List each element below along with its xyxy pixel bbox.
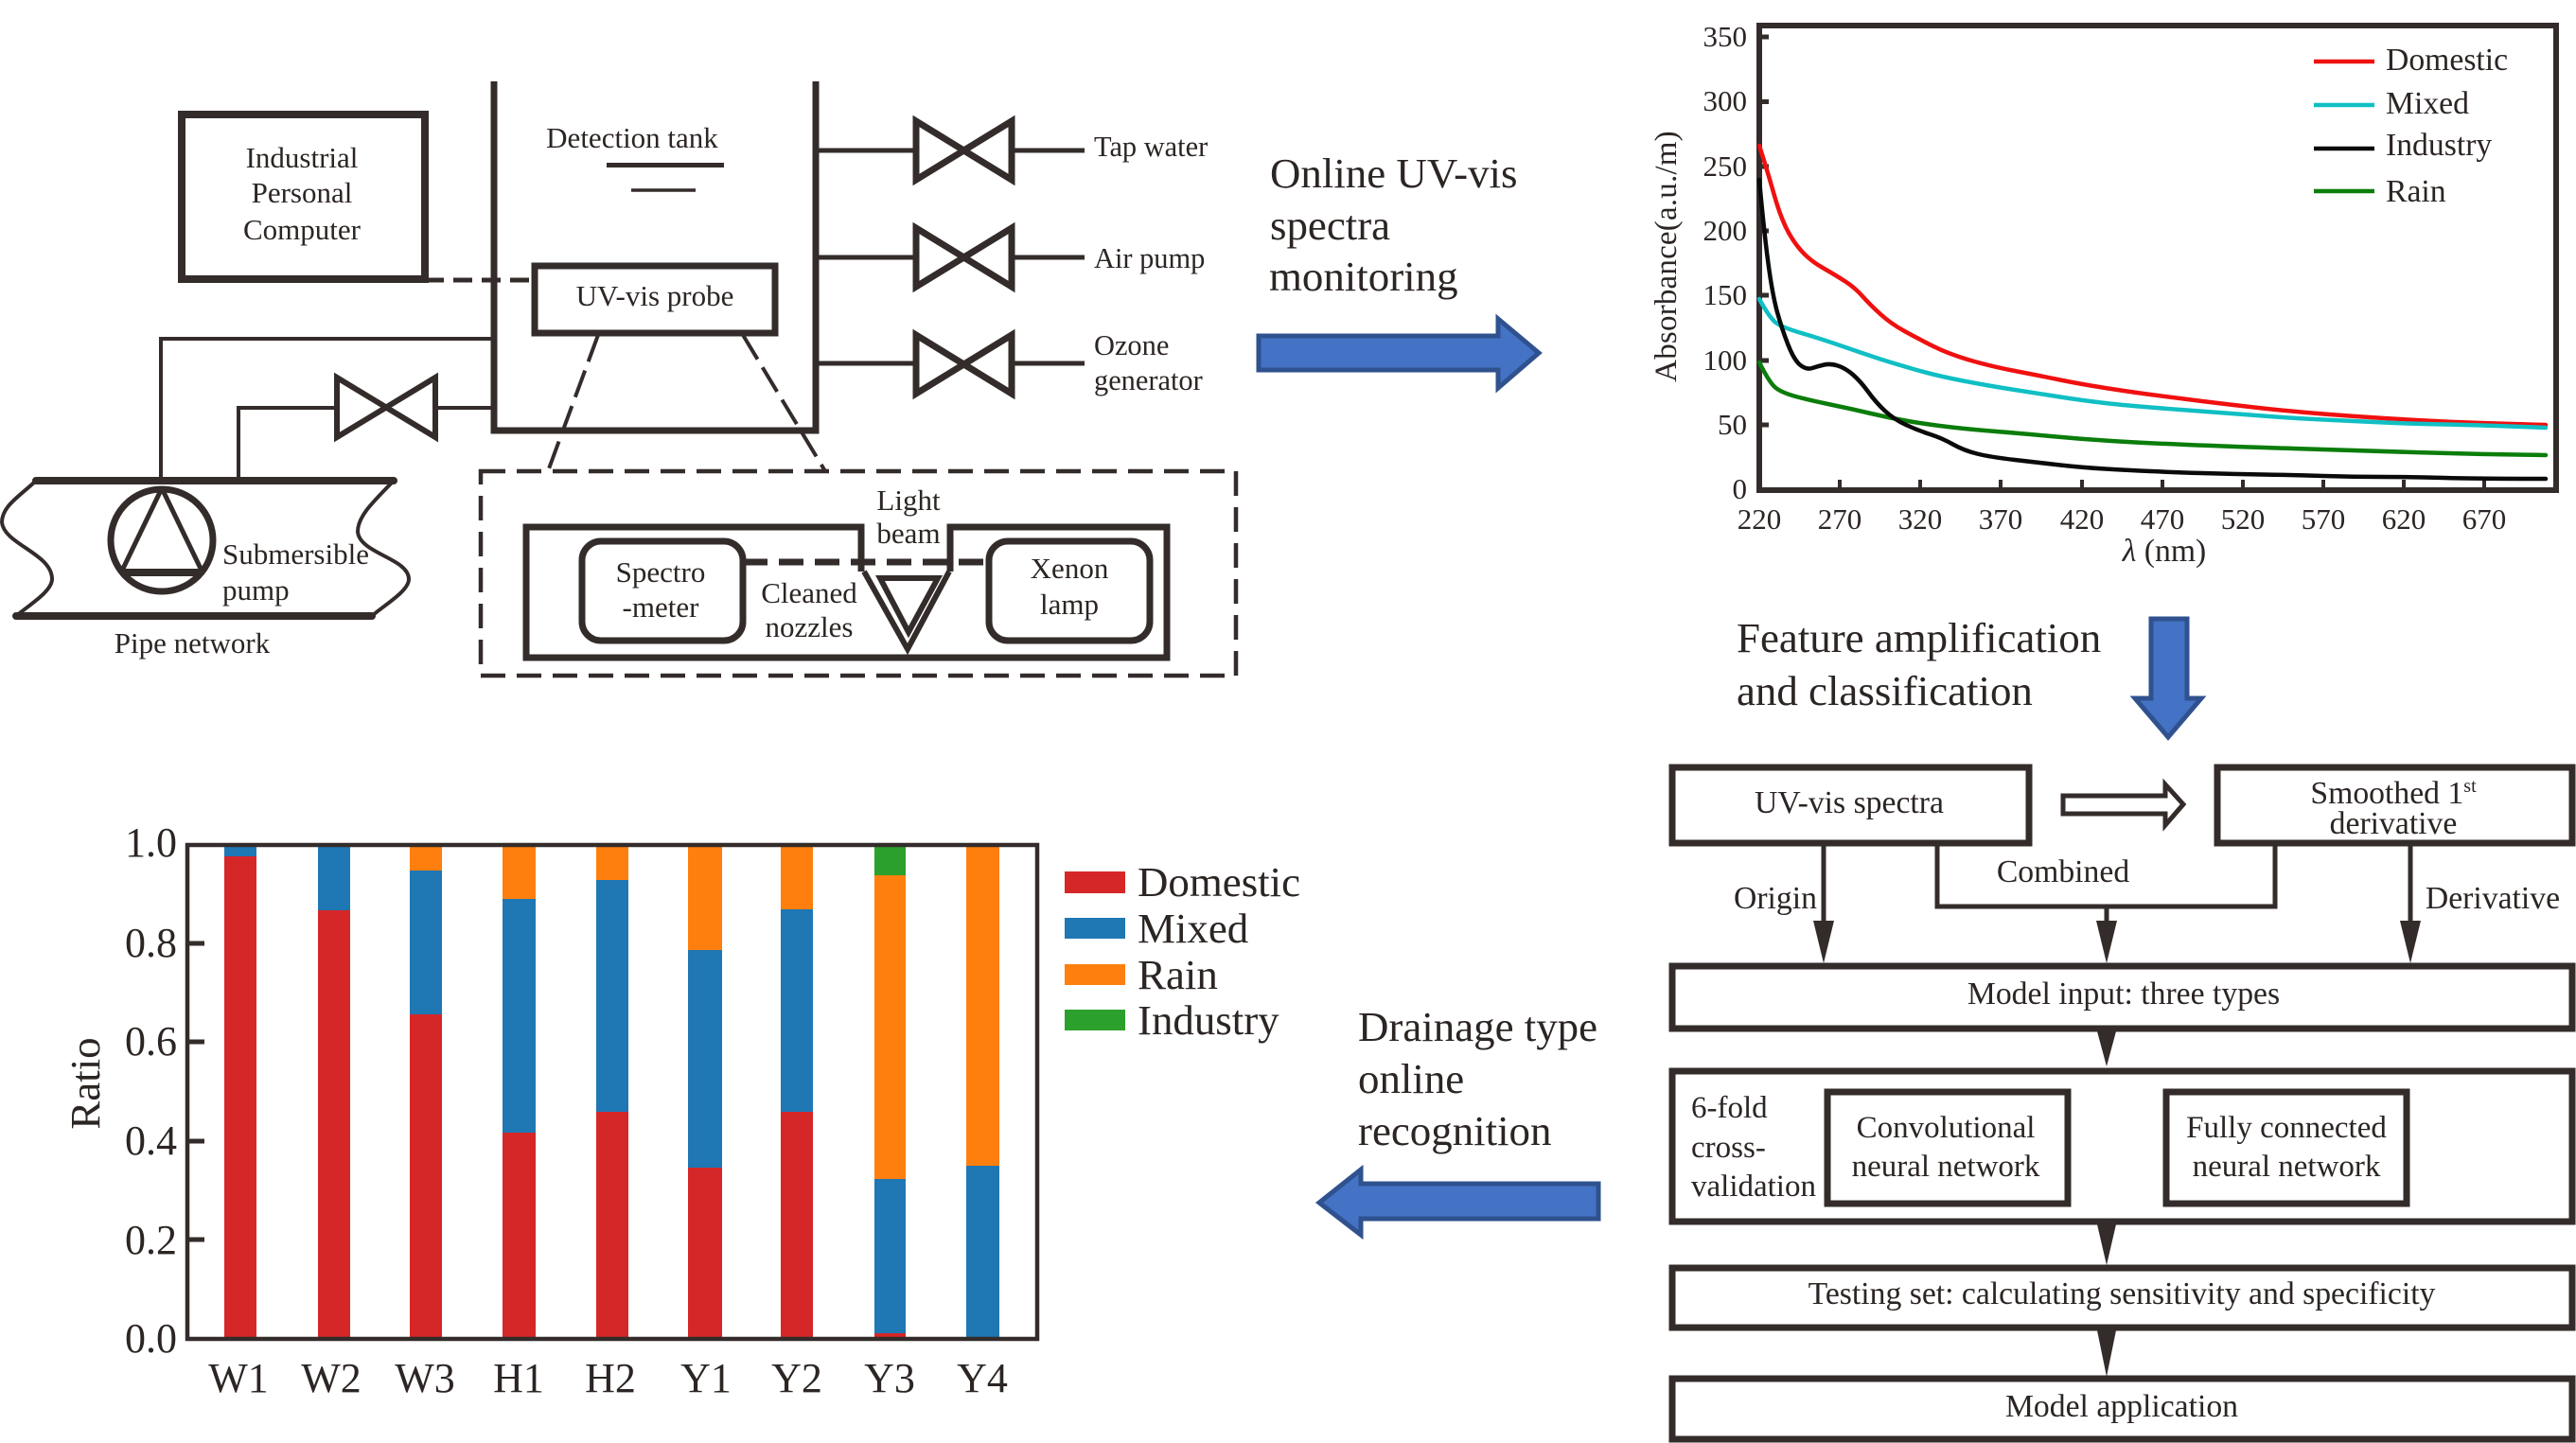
box: model input: Model input: three types [1967,977,2280,1012]
y axis tick labels: 50 [1718,408,1747,441]
pipes from submersible pump to tank [161,339,494,480]
valve: ozone generator: generator [1094,364,1203,396]
spectrometer [582,541,743,641]
box: industrial personal computer: Industrial [246,141,358,174]
probe body [526,527,1167,658]
dashed projection lines [548,335,825,471]
arrow: derivative [2400,844,2560,963]
y axis tick labels: 250 [1703,150,1747,183]
valve: ozone generator: Ozone [1094,329,1169,361]
bars H2 [596,846,628,1337]
bars Y2 [781,846,813,1337]
arrow: input to validation [2097,1031,2116,1066]
dashed link: computer to probe [425,278,534,282]
box: UV-vis probe [535,266,775,333]
box: 6-fold cross-validation: validation [1691,1170,1816,1204]
y axis labels: 0.4 [125,1117,177,1164]
x axis labels: Y4 [957,1355,1008,1401]
legend: Domestic [1138,858,1300,906]
x axis labels: H1 [493,1355,544,1401]
x axis tick labels: 370 [1979,502,2022,536]
valve: tap water: Tap water [1094,131,1208,163]
box: industrial personal computer [182,114,425,279]
bars W2 [318,846,350,1337]
light beam: beam [876,517,941,550]
bars W1 [224,846,256,1337]
x axis labels: W1 [208,1355,269,1401]
box: industrial personal computer: Personal [252,176,352,209]
panel: model flowchart [1672,767,2572,1439]
x axis tick labels: 220 [1738,502,1781,536]
legend: Industry [2386,128,2492,163]
arrow: combined: Combined [1997,854,2129,889]
arrow: derivative: Derivative [2426,881,2560,916]
cleaned nozzles: Cleaned [761,576,857,609]
box: model input [1672,966,2572,1029]
bars H1 [503,846,536,1337]
box: smoothed first derivative: derivative [2330,806,2457,841]
y axis labels: 0.6 [125,1018,177,1065]
spectrometer: Spectro [616,555,705,589]
bars W3 [410,846,442,1337]
valve: air pump [816,228,1205,287]
submersible pump: pump [222,573,290,607]
xenon lamp [989,541,1150,641]
detection tank: Detection tank [546,121,718,154]
legend: Mixed [2386,86,2469,121]
legend: Rain [1138,951,1218,998]
arrow: right to spectra chart [1259,319,1539,388]
cleaned nozzles: nozzles [766,610,853,643]
label: feature amplification and classification: and classification [1737,667,2033,714]
x axis labels: Y2 [771,1355,822,1401]
box: testing set: Testing set: calculating sensitivity and specificity [1808,1276,2436,1311]
box: smoothed first derivative [2217,767,2572,843]
arrow: origin: Origin [1734,881,1817,916]
y axis tick labels: 150 [1703,278,1747,311]
bars Y3 [874,846,906,1337]
x axis labels: H2 [585,1355,636,1401]
box: fully connected neural network: Fully connected [2186,1111,2387,1145]
bars Y1 [688,846,722,1337]
box: convolutional neural network: neural network [1852,1150,2040,1184]
y axis labels [125,819,177,1362]
x axis tick labels: 320 [1898,502,1942,536]
y axis tick labels [1703,20,1747,505]
arrow: left to bar chart [1319,1170,1598,1235]
x axis labels: Y3 [864,1355,915,1401]
x axis tick labels: 520 [2221,502,2265,536]
panel: monitoring system schematic [2,81,1236,676]
cleaned nozzles [761,572,949,649]
curve: rain [1759,362,2546,455]
pipe network [2,481,409,660]
y axis labels: 0.0 [125,1315,177,1362]
xenon lamp: lamp [1040,588,1099,621]
x axis tick labels: 420 [2060,502,2104,536]
box: model application: Model application [2005,1389,2238,1424]
label: online UV-vis spectra monitoring: spectra [1270,202,1390,249]
y axis ticks [187,943,204,1240]
chart: absorbance spectra [1650,20,2556,569]
x axis labels [208,1355,1008,1401]
x axis title: λ (nm) [2122,534,2206,569]
x axis labels: Y1 [680,1355,732,1401]
valve: air pump: Air pump [1094,242,1205,274]
legend: Domestic [2386,43,2508,78]
box: UV-vis spectra: UV-vis spectra [1755,785,1944,820]
arrow: origin [1734,844,1834,963]
y axis labels: 0.2 [125,1217,177,1263]
curve: mixed [1759,299,2546,428]
axes frame [187,845,1037,1339]
y axis title: Absorbance(a.u./m) [1650,131,1684,382]
x axis tick labels: 470 [2141,502,2184,536]
arrow: combined [1937,844,2275,963]
y axis tick labels: 300 [1703,84,1747,117]
y axis tick labels: 100 [1703,343,1747,377]
valve: ozone generator [816,329,1203,396]
submersible pump [111,488,369,607]
box: 6-fold cross-validation: cross- [1691,1131,1766,1165]
label: online UV-vis spectra monitoring [1269,150,1517,300]
box: 6-fold cross-validation [1672,1071,2572,1222]
legend: Industry [1138,996,1279,1044]
light beam [743,484,989,562]
box: model application [1672,1379,2572,1439]
x axis ticks [1840,480,2484,490]
label: drainage type online recognition: Drainage type [1358,1003,1597,1050]
box: testing set [1672,1268,2572,1328]
box: UV-vis probe: UV-vis probe [576,279,733,312]
xenon lamp: Xenon [1031,552,1109,585]
label: feature amplification and classification: Feature amplification [1737,614,2101,661]
label: online UV-vis spectra monitoring: Online UV-vis [1270,150,1517,197]
box: fully connected neural network: neural network [2193,1150,2381,1184]
legend: Rain [2386,174,2446,209]
detection tank [494,81,816,431]
panel: probe detail dashed box [481,471,1236,676]
hollow arrow to derivative [2063,784,2183,825]
x axis labels: W2 [301,1355,362,1401]
box: convolutional neural network [1827,1092,2068,1204]
label: drainage type online recognition: recognition [1358,1107,1551,1154]
y axis labels: 0.8 [125,920,177,966]
box: industrial personal computer: Computer [243,213,362,246]
x axis tick labels [1738,502,2506,536]
valve: tap water [816,121,1208,180]
box: smoothed first derivative: Smoothed 1 [2310,776,2463,811]
y axis labels: 1.0 [125,819,177,866]
chart: stacked bar of drainage ratio [62,819,1300,1401]
label: feature amplification and classification [1737,614,2101,714]
box: convolutional neural network: Convolutional [1857,1111,2035,1145]
curve: domestic [1759,146,2546,425]
label: drainage type online recognition: online [1358,1055,1464,1102]
y axis tick labels: 350 [1703,20,1747,53]
label: online UV-vis spectra monitoring: monitoring [1269,253,1458,300]
curve: industry [1759,180,2546,479]
submersible pump: Submersible [222,537,369,571]
x axis tick labels: 670 [2462,502,2506,536]
x axis tick labels: 620 [2382,502,2426,536]
x axis tick labels: 570 [2302,502,2345,536]
y axis ticks [1759,37,1769,425]
bars Y4 [966,846,999,1337]
box: 6-fold cross-validation: 6-fold [1691,1091,1768,1125]
legend: Mixed [1138,905,1248,952]
y axis tick labels: 200 [1703,214,1747,247]
legend [2314,43,2508,209]
y axis tick labels: 0 [1732,472,1747,505]
arrow: validation to testing [2097,1224,2116,1265]
y axis title: Ratio [62,1037,109,1130]
spectrometer: -meter [623,590,699,624]
light beam: Light [876,484,941,517]
arrow: down to flowchart [2135,619,2201,737]
label: drainage type online recognition [1358,1003,1597,1154]
arrow: testing to application [2097,1330,2116,1377]
x axis labels: W3 [395,1355,455,1401]
pipe network: Pipe network [115,626,271,660]
valve: inlet [238,378,494,480]
x axis tick labels: 270 [1818,502,1861,536]
box: UV-vis spectra [1672,767,2029,843]
legend [1065,858,1300,1044]
box: smoothed first derivative: st [2463,776,2477,797]
box: fully connected neural network [2166,1092,2407,1204]
